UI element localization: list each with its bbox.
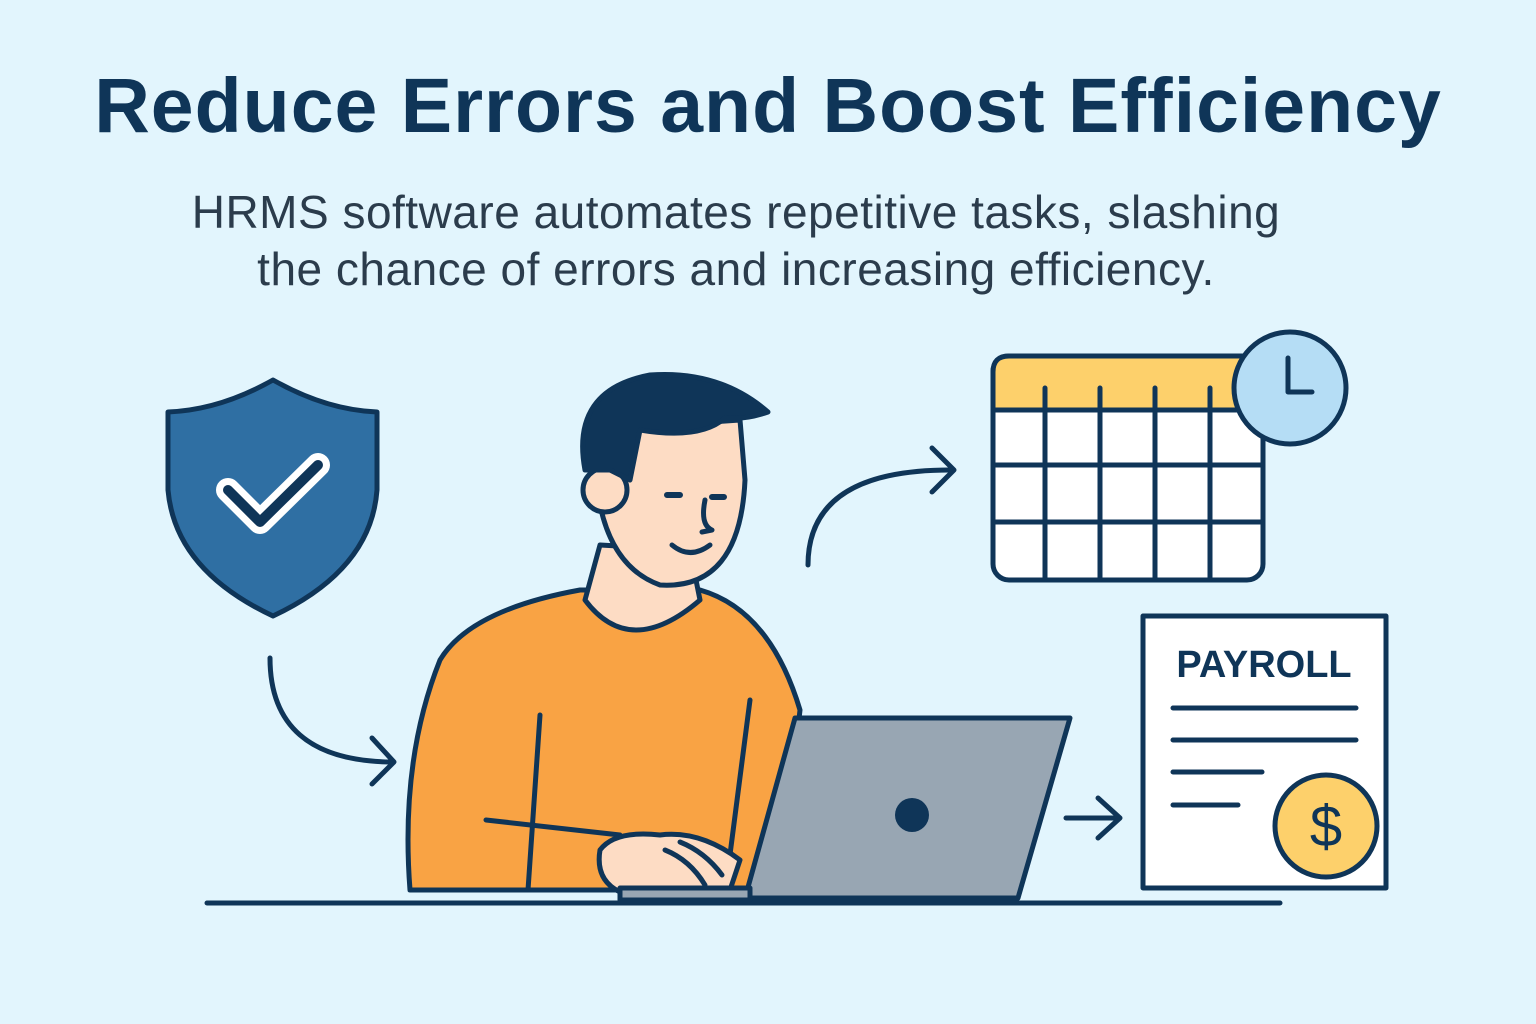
subtitle: the chance of errors and increasing efficiency. — [257, 243, 1215, 295]
arrow: to payroll — [1066, 798, 1120, 838]
laptop — [620, 718, 1070, 900]
icon: payroll document — [1143, 616, 1386, 888]
icon: shield — [168, 380, 377, 616]
subtitle: HRMS software automates repetitive tasks, slashing — [192, 186, 1280, 238]
subtitle — [192, 186, 1280, 295]
arrow: shield to person — [270, 658, 394, 784]
icon: calendar — [993, 332, 1346, 580]
icon: payroll document: PAYROLL — [1176, 644, 1352, 686]
desk line — [207, 900, 1280, 906]
icon: payroll document: $ — [1310, 794, 1342, 859]
person — [408, 374, 800, 892]
arrow: to calendar — [808, 448, 954, 565]
title: Reduce Errors and Boost Efficiency — [94, 63, 1442, 149]
